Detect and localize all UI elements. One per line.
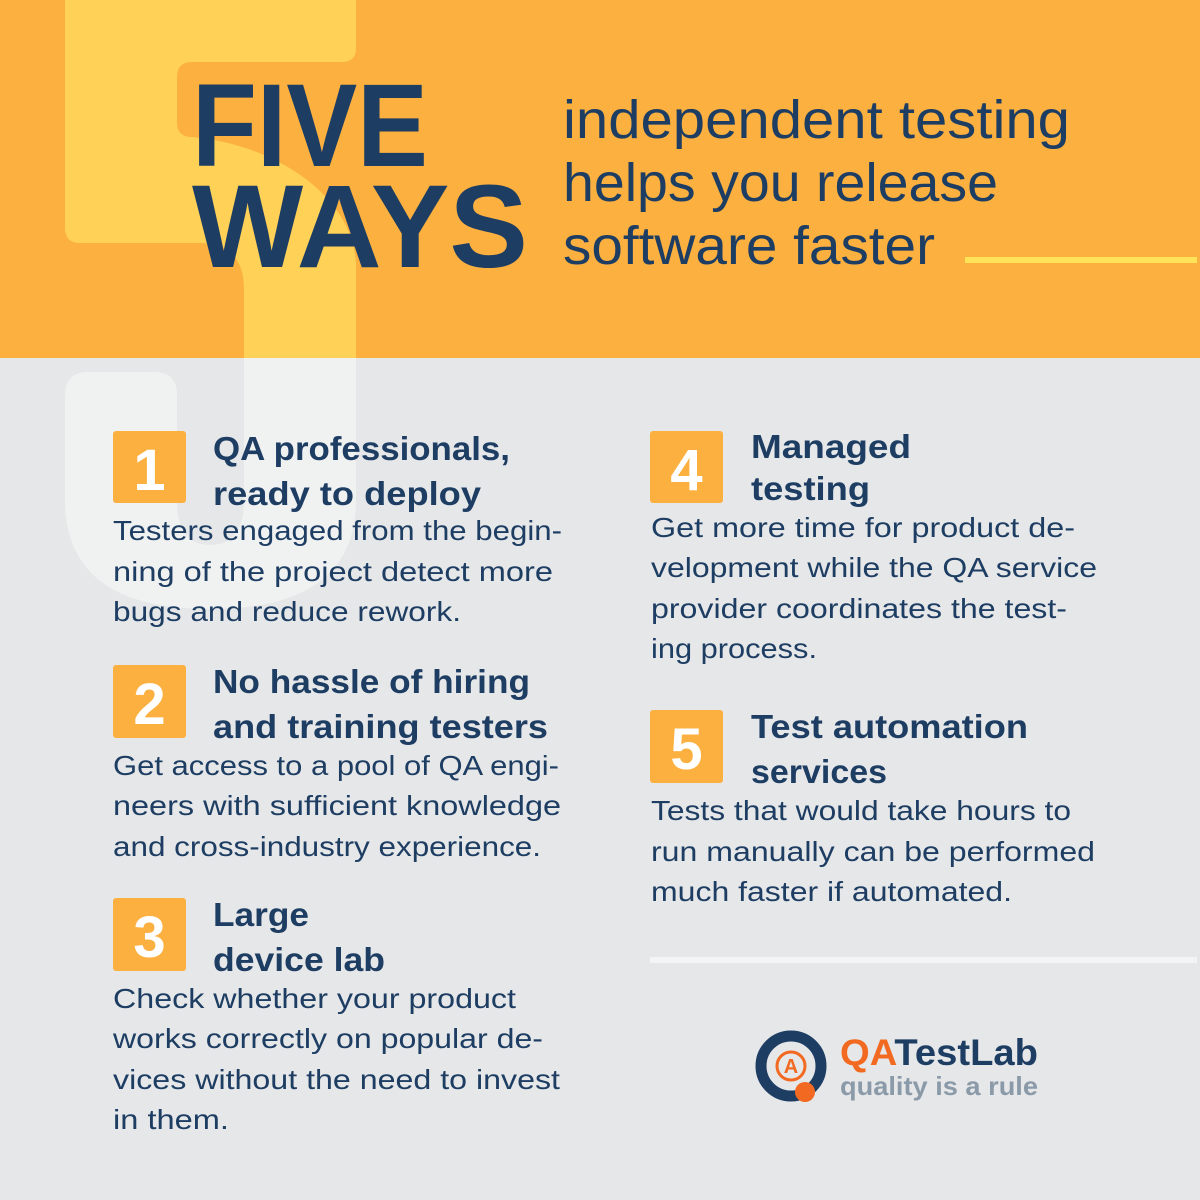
item 4: Managed (751, 428, 911, 465)
item 4: Get more time for product de- (651, 512, 1075, 543)
item 1 (113, 430, 562, 627)
item 2: and training testers (213, 708, 548, 745)
item 1: 1 (133, 438, 166, 503)
item 5: much faster if automated. (651, 876, 1012, 907)
item 3: device lab (213, 941, 385, 978)
item 2: and cross-industry experience. (113, 831, 541, 862)
subtitle: software faster (563, 216, 935, 276)
item 4: provider coordinates the test- (651, 593, 1067, 624)
item 1: QA professionals, (213, 430, 510, 467)
item 1: ready to deploy (213, 475, 482, 512)
logo: QATestLab: A (784, 1056, 798, 1078)
item 2: 2 (133, 672, 166, 737)
item 5: Test automation (751, 708, 1028, 745)
logo: QATestLab (761, 1032, 1038, 1102)
subtitle (563, 90, 1070, 276)
item 5: 5 (670, 717, 703, 782)
item 4: 4 (670, 438, 703, 503)
subtitle: helps you release (563, 153, 998, 213)
item 3: Check whether your product (113, 983, 516, 1014)
title: FIVE WAYS (192, 60, 528, 293)
title: FIVE WAYS: FIVE (192, 60, 428, 192)
logo: QATestLab: QATestLab (840, 1032, 1038, 1073)
subtitle: independent testing (563, 90, 1070, 150)
item 3: 3 (133, 905, 166, 970)
item 2 (113, 663, 561, 862)
item 3: vices without the need to invest (113, 1064, 560, 1095)
item 3: Large (213, 896, 309, 933)
item 1: ning of the project detect more (113, 556, 553, 587)
item 1: Testers engaged from the begin- (113, 515, 562, 546)
item 3 (112, 896, 560, 1135)
item 1: bugs and reduce rework. (113, 596, 461, 627)
item 4: velopment while the QA service (651, 552, 1097, 583)
item 2: No hassle of hiring (213, 663, 530, 700)
logo: QATestLab: quality is a rule (840, 1071, 1038, 1101)
item 4: ing process. (651, 633, 817, 664)
item 2: neers with sufficient knowledge (113, 790, 561, 821)
item 4: testing (751, 470, 870, 507)
item 3: works correctly on popular de- (112, 1023, 543, 1054)
title: FIVE WAYS: WAYS (192, 161, 528, 293)
item 5: services (751, 753, 887, 790)
item 3: in them. (113, 1104, 229, 1135)
item 5 (650, 708, 1095, 907)
item 4 (650, 428, 1097, 664)
item 5: run manually can be performed (651, 836, 1095, 867)
item 5: Tests that would take hours to (651, 795, 1071, 826)
item 2: Get access to a pool of QA engi- (113, 750, 559, 781)
